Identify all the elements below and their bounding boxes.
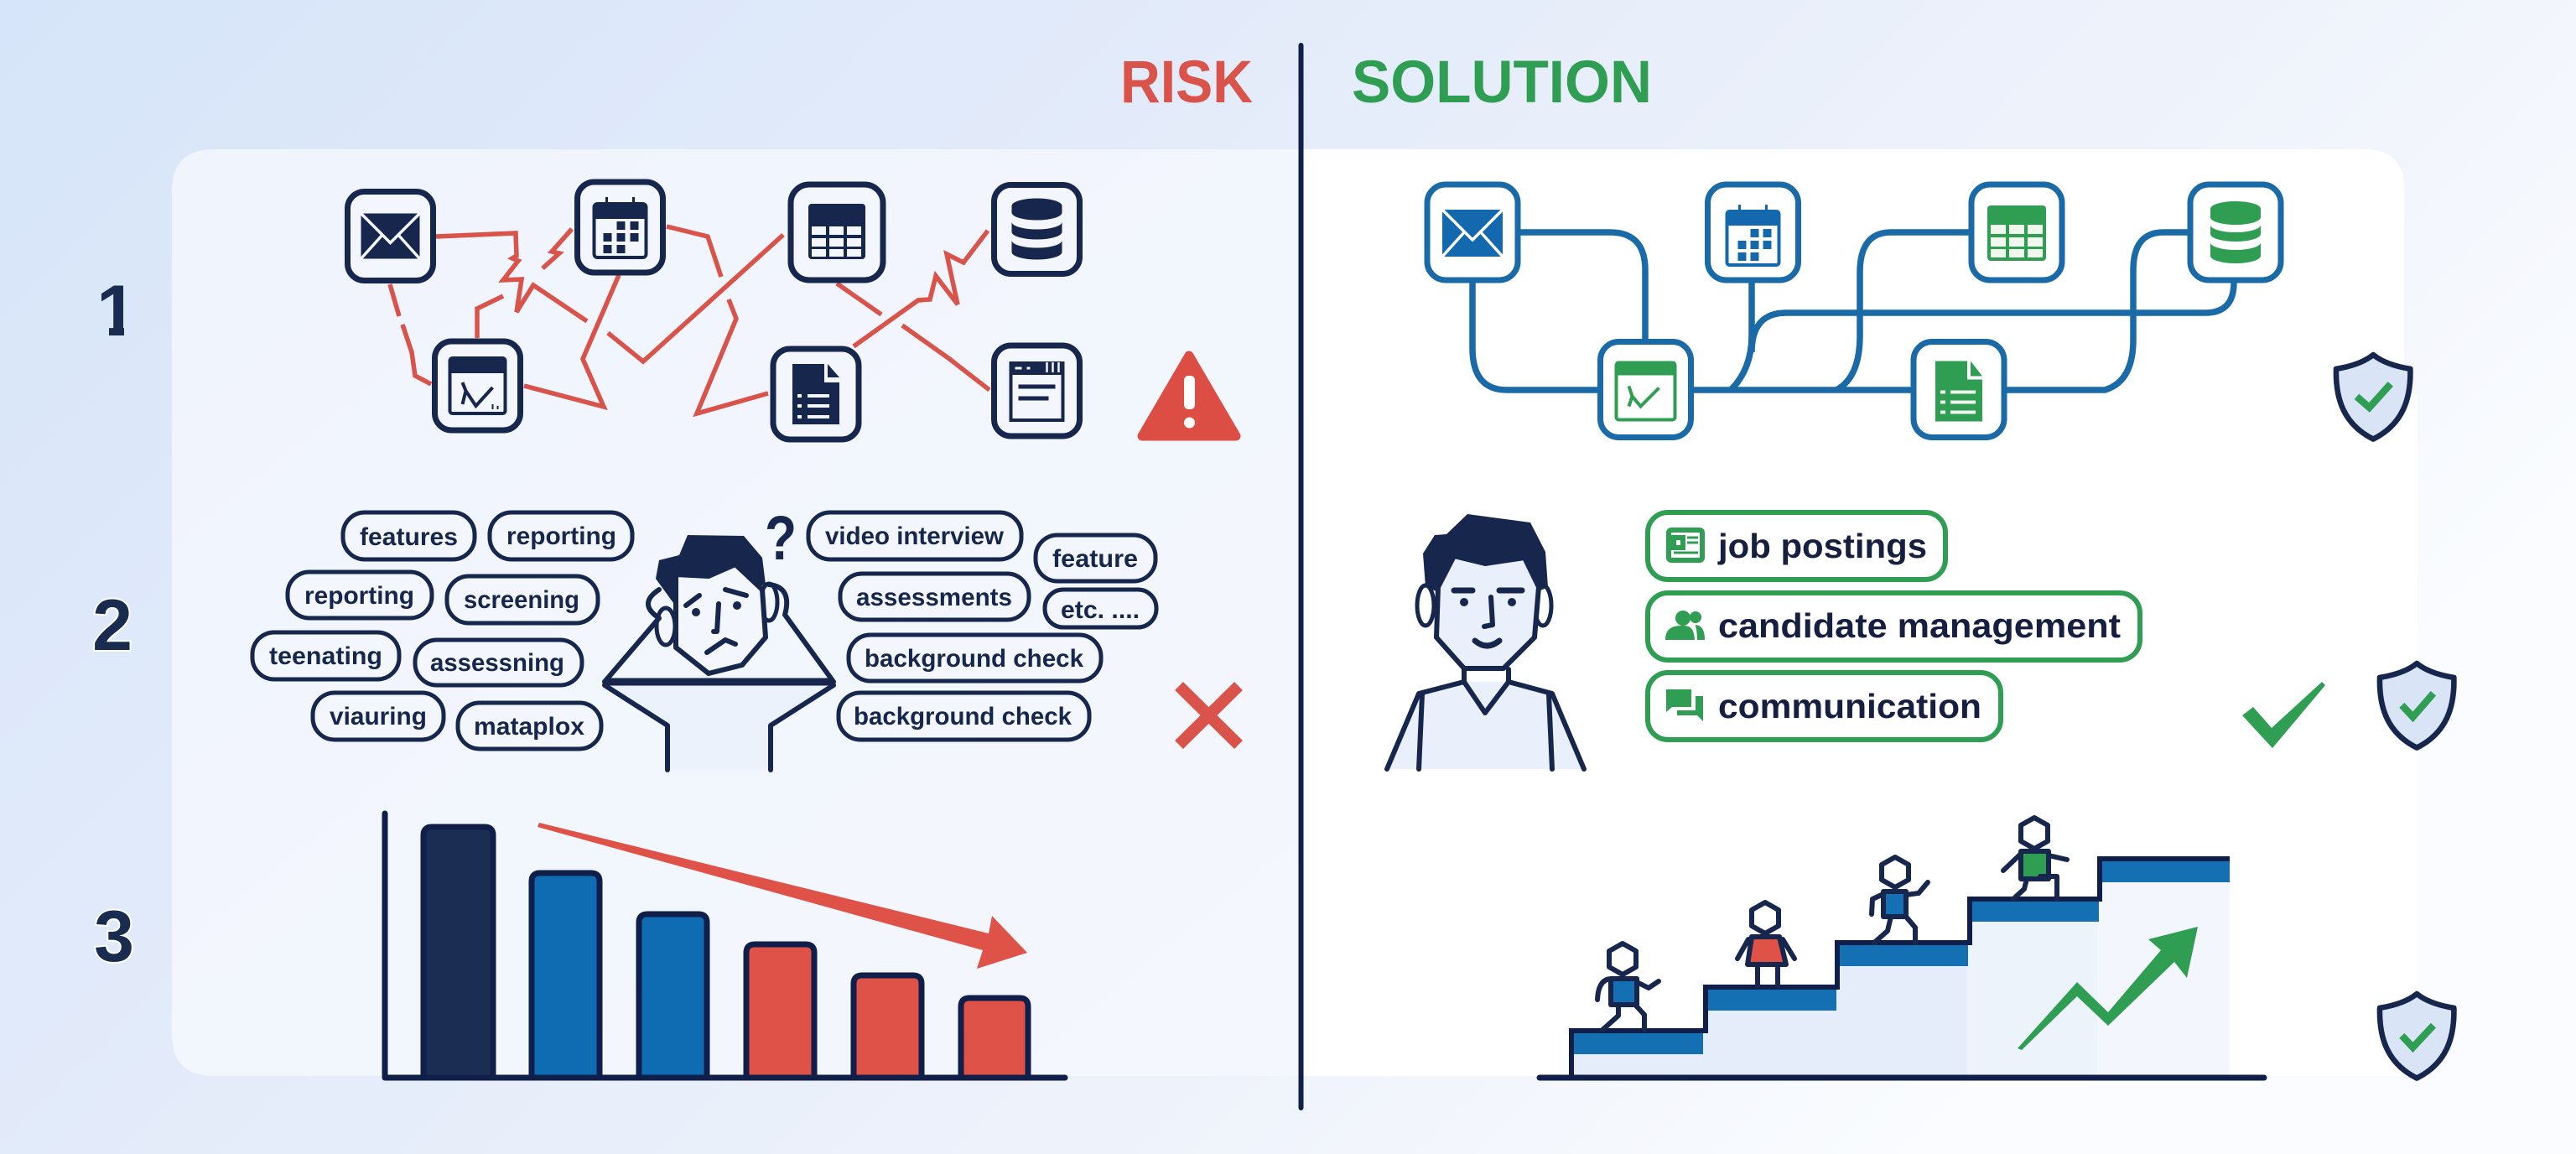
icon tile: document (risk) [773, 349, 859, 439]
pill: assessning [415, 640, 582, 685]
pill: feature [1036, 535, 1156, 581]
pill: reporting [490, 512, 632, 559]
pill: features [343, 512, 475, 559]
icon tile: chart window (solution) [1600, 342, 1690, 438]
bars [423, 827, 1028, 1078]
icon tile: chart window (risk) [434, 341, 520, 430]
icon: job card [1669, 530, 1702, 560]
panel: solution side [1301, 149, 2418, 1076]
heading: risk: RISK [1120, 49, 1253, 116]
pill: viauring [313, 693, 444, 740]
icon: chat bubbles [1666, 689, 1703, 721]
center divider [1298, 45, 1303, 1108]
pill: video interview [808, 512, 1021, 559]
stair fills [1574, 1036, 1703, 1075]
row number 1: 1 [96, 271, 137, 351]
solution pill: job postings [1648, 512, 1945, 580]
pill: reporting 2: reporting [304, 582, 414, 610]
solution pill: communication: communication [1718, 687, 1981, 725]
pill: teenating: teenating [269, 642, 382, 670]
pill: reporting: reporting [506, 522, 616, 550]
shield icon row 1 [2336, 355, 2410, 439]
pill: etc: etc. .... [1061, 596, 1140, 624]
icon: people [1665, 611, 1705, 640]
green check mark [2242, 682, 2325, 748]
climbing figure 1 [1597, 943, 1659, 1030]
question mark: ? [765, 503, 797, 573]
climbing figure 4 [2003, 818, 2067, 899]
feature pills: risk left group [252, 512, 632, 749]
growth staircase [1540, 818, 2264, 1078]
shield icon row 3 [2380, 994, 2454, 1079]
pill: video interview: video interview [825, 522, 1005, 550]
solution pill: communication [1648, 673, 2001, 740]
climbing figure 3 [1872, 857, 1928, 943]
icon tile: database (solution) [2190, 185, 2281, 280]
pill: assessments: assessments [856, 584, 1012, 611]
ground line [1540, 1075, 2264, 1080]
red x mark [1179, 686, 1239, 745]
pill: screening [447, 576, 598, 623]
tangled red connections [390, 226, 989, 413]
solution pill: candidate management: candidate management [1718, 606, 2121, 645]
green growth arrow [2018, 927, 2198, 1050]
feature pills: risk right group [808, 512, 1156, 740]
solution pill: candidate management [1648, 593, 2140, 660]
bar chart: decline [385, 814, 1065, 1078]
solution pill: job postings: job postings [1717, 527, 1927, 565]
icon tile: form window (risk) [995, 346, 1080, 436]
pill: features: features [360, 523, 458, 551]
confused person [605, 535, 834, 770]
heading: solution: SOLUTION [1352, 49, 1652, 116]
pill: background check 2 [839, 693, 1089, 740]
icon tile: calendar (solution) [1707, 185, 1798, 280]
icon tile: database (risk) [995, 185, 1080, 273]
shield icon row 2 [2380, 663, 2454, 748]
row number 2: 2 [92, 585, 132, 666]
icon tile: mail (solution) [1427, 185, 1518, 280]
pill: teenating [252, 632, 399, 679]
pill: assessning: assessning [430, 649, 564, 677]
icon tile: document (solution) [1914, 342, 2004, 438]
chart axes [385, 814, 1065, 1078]
icon tile: mail (risk) [347, 191, 433, 280]
pill: background check: background check [865, 645, 1083, 673]
pill: background check [849, 635, 1101, 681]
pill: feature: feature [1052, 545, 1138, 573]
warning icon [1142, 356, 1236, 436]
pill: assessments [840, 574, 1029, 620]
clean blue connections [1472, 232, 2234, 390]
pill: background check 2: background check [854, 703, 1072, 730]
climbing figure 2 [1737, 902, 1794, 987]
pill: screening: screening [464, 586, 579, 614]
pill: viauring: viauring [330, 703, 427, 730]
confident person [1387, 514, 1584, 769]
stair tread bands [1574, 861, 2230, 1054]
icon tile: calendar (risk) [577, 182, 662, 273]
decline arrow [538, 823, 1027, 969]
row number 3: 3 [94, 897, 134, 977]
icon tile: table (solution) [1971, 185, 2062, 280]
stair outline [1571, 859, 2230, 1078]
pill: reporting 2 [288, 572, 432, 618]
pill: etc [1045, 590, 1156, 627]
panel: risk side [172, 149, 1301, 1076]
icon tile: table (risk) [791, 185, 883, 280]
pill: mataplox [458, 703, 601, 749]
pill: mataplox: mataplox [474, 713, 584, 741]
